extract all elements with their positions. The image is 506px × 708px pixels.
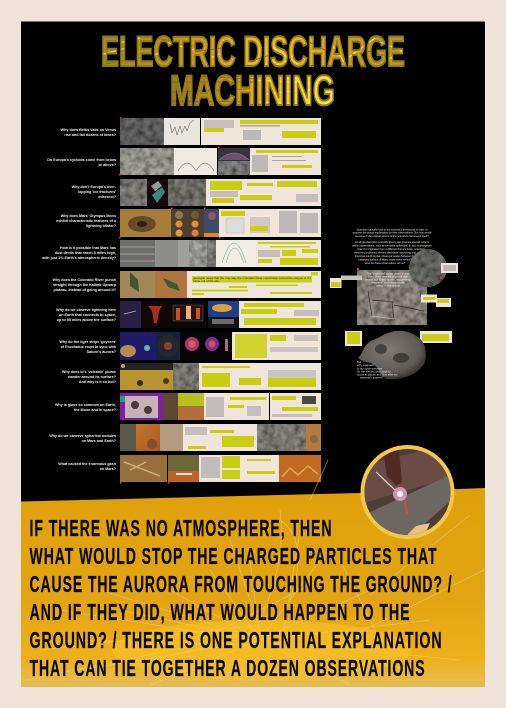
row 7: upper atmospheric lightning [56, 301, 321, 328]
row 3: Europa fractures [72, 179, 321, 206]
right column: side note: therefore could explain observed scales between the [355, 254, 416, 258]
right column: grey canyon image [357, 268, 427, 325]
row 8: Enceladus geysers [59, 332, 321, 360]
row 5: Mars dust devils: dust devils that reach 8 miles high, [55, 251, 116, 255]
right column: side note: As single-disruption scientific theory can produce special outliers [355, 240, 430, 244]
right column: closing question: But [357, 360, 361, 364]
right column: side note [352, 228, 432, 265]
row 3: Europa fractures: lapping 'ice fractures' [78, 190, 116, 194]
right column: grey canyon image: would not follow layers, suggesting [366, 278, 411, 282]
title: MACHINING [170, 68, 335, 115]
row 11: spherical nodules: Why do we observe spherical nodules [49, 434, 116, 438]
row 5: Mars dust devils: How is it possible that Mars has [60, 246, 116, 250]
row 4: Olympus Mons: Why does Mars' Olympus Mons [61, 214, 116, 218]
row 9: Io plumes [62, 363, 321, 390]
right column: cratered circular image [409, 249, 447, 287]
row 5: Mars dust devils [41, 240, 321, 267]
yellow band [21, 460, 485, 687]
row 4: Olympus Mons: exhibit characteristic features of a [56, 219, 117, 223]
row 10: glass [55, 393, 321, 420]
icon: welding photo circle [360, 440, 456, 542]
right column: callout notes [330, 263, 458, 346]
row 6: Colorado River: Why does the Colorado River punch [52, 278, 117, 282]
row 11: spherical nodules [49, 424, 321, 451]
row 12: Mars gashes: What caused the enormous gash [58, 462, 117, 466]
row 7: upper atmospheric lightning: Why do we observe lightning here [56, 308, 116, 312]
row 6: Colorado River: straight through the Kaibab Upwarp [53, 283, 117, 287]
right column: side note: we know if the original source of the scientist's framework itself? [355, 234, 429, 238]
row 9: Io plumes: And why is it so hot? [79, 380, 117, 384]
right column: side note: what do these observations tell us? [365, 261, 406, 265]
row 3: Europa fractures: Why don't Europa's over- [72, 185, 117, 189]
row 3: Europa fractures: intersect? [98, 195, 117, 199]
row 6: Colorado River: came out of the sky. [193, 279, 220, 283]
row 9: Io plumes: wander around its surface? [67, 375, 117, 379]
right column: grey canyon image: The 'expected' crater chain image [366, 272, 410, 276]
row 1: Beta Regio [61, 117, 321, 145]
right column: asteroid [358, 331, 426, 379]
right column: grey canyon image: order — like a scar [376, 284, 400, 288]
row 6: Colorado River [52, 271, 321, 298]
title [101, 29, 405, 115]
right column: closing question: occur at places and flow after an [357, 372, 398, 376]
right column: side note: theorizing a plasma, electric discharge machining and [354, 250, 416, 254]
right column: closing question: why magnetic [357, 363, 375, 367]
body statement [30, 515, 452, 681]
row 10: glass: the Moon and in space? [74, 408, 117, 412]
right column: grey canyon image: from Mars reveals grooves that [368, 274, 408, 278]
row 4: Olympus Mons: lightning blister? [86, 224, 117, 228]
right column: side note: Scientists typically look to the scientist's framework in order to [357, 228, 428, 232]
black poster panel [21, 22, 485, 502]
right column: side note: note: if it originates from a different frame's basis, scientists [357, 247, 426, 251]
right column: side note: within observations, such as hematite spherules. In fact, investigators [352, 244, 432, 248]
right column: side note: planetary surface of Mars, make some sense? [358, 258, 412, 262]
right column: closing question: asteroid's answer? [360, 376, 384, 380]
row 2: Europa cycloids: or above? [98, 163, 117, 167]
row 4: Olympus Mons [56, 208, 321, 238]
row 11: spherical nodules: on Mars and Earth? [82, 439, 117, 443]
row 10: glass: Why is glass so common on Earth, [55, 403, 116, 407]
right column: grey canyon image: magnetic and electrostatic [371, 280, 405, 284]
row 1: Beta Regio: Why does Beltis Valis on Venus [61, 128, 116, 132]
row 12: Mars gashes [58, 455, 321, 484]
row 2: Europa cycloids [47, 146, 321, 176]
row 12: Mars gashes: on Mars? [100, 467, 117, 471]
row 8: Enceladus geysers: Saturn's aurora? [87, 350, 117, 354]
row 1: Beta Regio: rise and fall dozens of times? [64, 133, 117, 137]
row 2: Europa cycloids: Do Europa's cycloids come from below [47, 158, 116, 162]
row 7: upper atmospheric lightning: up to 55 miles above the surface? [57, 318, 117, 322]
right column: closing question [357, 360, 398, 380]
row 7: upper atmospheric lightning: on Earth that connects to space, [59, 313, 116, 317]
row 6: Colorado River: plateau, instead of going around it? [54, 288, 117, 292]
row 9: Io plumes: Why does Io's 'volcanic' plume [62, 370, 116, 374]
right column: closing question: to act upon surfaces [357, 366, 383, 370]
row 8: Enceladus geysers: of Enceladus erupt in sync with [61, 345, 117, 349]
right column: side note: propose the actual explanation for their observations. But how would [353, 230, 432, 234]
row 6: Colorado River: geologist noted that the only way the Colorado River could have carved the canyon is if it [193, 276, 311, 280]
row 5: Mars dust devils: with just 1% Earth's atmospheric density? [41, 256, 117, 260]
right column: closing question: for the electric discharge to [357, 370, 391, 374]
row 8: Enceladus geysers: Why do the tiger stripe 'geysers' [59, 340, 116, 344]
